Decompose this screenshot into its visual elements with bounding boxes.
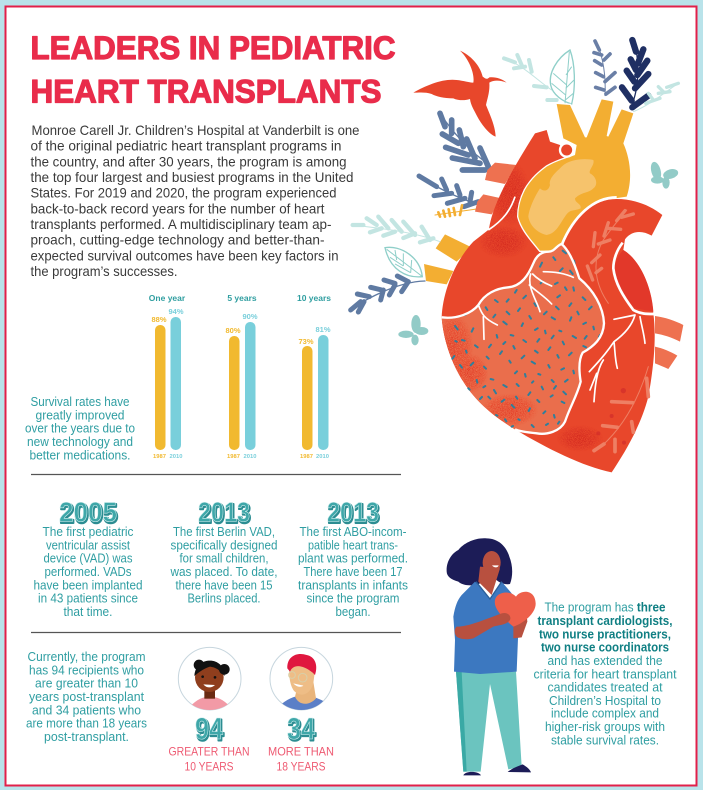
timeline: 2005 [34, 496, 143, 619]
sprig: light teal left [353, 217, 440, 242]
intro text block: Monroe Carell Jr. Children’s Hospital at Vanderbilt is one [32, 123, 360, 138]
intro text block: States. For 2019 and 2020, the program experienced [30, 186, 336, 201]
recipients text: has 94 recipients who [29, 663, 144, 677]
staffing text: higher-risk groups with [545, 720, 665, 734]
heart: yellow aorta [518, 99, 633, 251]
heart: left red body [442, 130, 580, 429]
staffing text: two nurse coordinators [541, 641, 669, 655]
arm [455, 613, 510, 639]
timeline: 2005: in 43 patients since [38, 592, 138, 606]
sprig: navy [622, 40, 648, 108]
timeline: 2013 Berlin: Berlins placed. [188, 592, 260, 606]
butterfly right [649, 161, 679, 189]
intro text block: back-to-back record years for the number of heart [30, 201, 325, 216]
column headings: 10 years [297, 293, 331, 303]
timeline: 2005: that time. [64, 605, 112, 619]
staffing text: The program has three [544, 601, 666, 615]
divider [31, 474, 401, 476]
held heart [495, 592, 536, 627]
avatar: man [270, 647, 333, 712]
timeline: 2013 Berlin: 2013 [198, 496, 250, 528]
timeline: 2005: 2005 [59, 496, 117, 528]
recipients text: post-transplant. [44, 730, 129, 744]
intro text block [30, 123, 360, 279]
timeline: 2013 Berlin: was placed. To date, [170, 565, 278, 579]
value labels: 80% [225, 326, 241, 335]
heart: pink ventricle [442, 244, 604, 434]
pants [456, 672, 522, 772]
intro text block: transplants performed. A multidisciplinary team ap- [30, 217, 332, 232]
timeline: 2013 ABO: The first ABO-incom- [300, 525, 406, 539]
grain: left atrium [482, 166, 526, 256]
timeline: 2005: device (VAD) was [44, 552, 132, 566]
intro text block: the program’s successes. [30, 264, 178, 279]
staffing text: Children’s Hospital to [549, 694, 661, 708]
value labels: 81% [315, 325, 331, 334]
branch decorations on red body [587, 210, 648, 452]
ventricle leaf marks [452, 251, 600, 427]
hair [447, 538, 512, 585]
staffing text: two nurse practitioners, [539, 627, 671, 641]
title: LEADERS IN PEDIATRIC [30, 30, 396, 66]
sprig: slate upper [440, 113, 490, 170]
hand behind heart [513, 615, 527, 638]
value labels: 90% [242, 312, 258, 321]
value labels [151, 307, 331, 346]
title: HEART TRANSPLANTS [30, 74, 382, 110]
heart: dark chamber [614, 250, 653, 312]
grain: ventricle patches [442, 318, 536, 426]
sprig: light teal top [504, 55, 557, 100]
sprig: slate middle [418, 176, 478, 207]
timeline: 2013 Berlin: there have been 15 [176, 578, 273, 592]
stat: 34: 34 [288, 712, 317, 748]
survival text [25, 395, 135, 462]
timeline: 2013 ABO: since the program [306, 592, 400, 606]
stat: 34 [268, 711, 334, 774]
year labels: 1987 [153, 454, 166, 460]
stat: 34: 18 YEARS [276, 760, 326, 774]
column headings: One year [149, 293, 186, 303]
recipients text: are more than 18 years [26, 717, 147, 731]
illustration: heart with leaves and bird [351, 40, 683, 472]
atrium white line [488, 197, 515, 230]
title [30, 30, 396, 110]
intro text block: the top four largest and busiest programs in the United [30, 170, 354, 185]
staffing text: stable survival rates. [551, 733, 659, 747]
staffing text: criteria for heart transplant [534, 667, 677, 681]
heart: ring vessel [560, 143, 573, 157]
staffing text [534, 601, 677, 747]
stat: 34: 34 [287, 711, 316, 746]
illustration: nurse holding heart [447, 538, 536, 775]
year labels: 1987 [300, 454, 313, 460]
recipients text: and 34 patients who [32, 703, 141, 717]
value labels: 94% [168, 307, 184, 316]
sprig: thin slate [594, 41, 615, 96]
survival text: new technology and [27, 435, 133, 449]
stat: 94: 94 [196, 712, 225, 748]
staffing text: transplant cardiologists, [538, 614, 672, 628]
shoes [463, 764, 531, 775]
value labels: 73% [298, 337, 314, 346]
survival text: better medications. [30, 448, 130, 462]
timeline: 2013 Berlin: 2013 [199, 498, 251, 529]
upper-frame elements: bird and sprigs [413, 40, 679, 217]
survival text: greatly improved [36, 408, 125, 422]
bars [155, 317, 328, 450]
timeline: 2013 ABO: began. [336, 605, 370, 619]
timeline: 2013 Berlin: specifically designed [170, 538, 278, 552]
survival text: over the years due to [25, 422, 135, 436]
column headings [149, 293, 331, 303]
staffing text: include complex and [551, 707, 659, 721]
stat: 94: 94 [195, 711, 224, 746]
leaf: outlined teal [385, 247, 422, 277]
recipients text: years post-transplant [29, 690, 145, 704]
ventricle white outline [442, 244, 604, 434]
white veins [478, 272, 645, 402]
vessels: pink tubes [475, 163, 517, 214]
timeline: 2005: The first pediatric [42, 525, 134, 539]
year labels: 2010 [170, 454, 182, 460]
divider [31, 632, 401, 634]
timeline: 2005: have been implanted [34, 578, 143, 592]
heart: right red body [515, 199, 662, 472]
avatars [178, 647, 333, 712]
shirt [453, 582, 518, 674]
timeline: 2005: 2005 [60, 498, 118, 529]
timeline: 2013 ABO: There have been 17 [304, 565, 403, 579]
recipients text: are greater than 10 [35, 677, 138, 691]
timeline: 2013 Berlin: for small children, [180, 552, 268, 566]
intro text block: proach, cutting-edge technology and better-than- [30, 233, 324, 248]
intro text block: expected survival outcomes have been key factors in [30, 248, 338, 263]
red dots [596, 388, 626, 445]
staffing text: candidates treated at [548, 681, 663, 695]
intro text block: the country, and after 30 years, the program is among [30, 154, 346, 169]
timeline: 2013 ABO [298, 496, 408, 619]
intro text block: of the original pediatric heart transplant programs in [30, 139, 342, 154]
survival text: Survival rates have [30, 395, 130, 409]
timeline: 2005: performed. VADs [44, 565, 132, 579]
stat: 94 [168, 711, 250, 774]
bird [413, 51, 507, 137]
sprig: slate lower [351, 276, 425, 312]
timeline: 2013 Berlin: The first Berlin VAD, [173, 525, 275, 539]
sprig: small yellow [435, 205, 477, 217]
column headings: 5 years [227, 293, 257, 303]
stat: 94: 10 YEARS [184, 760, 234, 774]
butterfly left [398, 315, 428, 345]
timeline: 2013 Berlin [170, 496, 278, 606]
recipients text: Currently, the program [28, 650, 146, 664]
year labels [153, 454, 329, 460]
stat: 94: GREATER THAN [168, 744, 250, 758]
stat: 34: MORE THAN [268, 744, 334, 758]
recipients text [26, 650, 147, 744]
value labels: 88% [151, 315, 167, 324]
staffing text: and has extended the [548, 654, 663, 668]
neck and face [478, 567, 500, 595]
avatar: girl [178, 647, 241, 712]
timeline: 2005: ventricular assist [46, 538, 130, 552]
sprig: light teal right [633, 83, 678, 112]
vessels: side tubes [424, 234, 683, 369]
year labels: 2010 [316, 454, 329, 460]
timeline: 2013 ABO: 2013 [327, 496, 379, 528]
grain: lower right [560, 427, 600, 450]
timeline: 2013 ABO: transplants in infants [298, 578, 408, 592]
timeline: 2013 ABO: 2013 [328, 498, 380, 529]
leaf: outlined teal top [550, 50, 574, 104]
timeline: 2013 ABO: plant was performed. [298, 552, 408, 566]
year labels: 2010 [244, 454, 256, 460]
bar chart: survival rates [149, 293, 331, 460]
year labels: 1987 [227, 454, 240, 460]
timeline: 2013 ABO: patible heart trans- [308, 538, 398, 552]
oak leaf on aorta [528, 159, 596, 235]
